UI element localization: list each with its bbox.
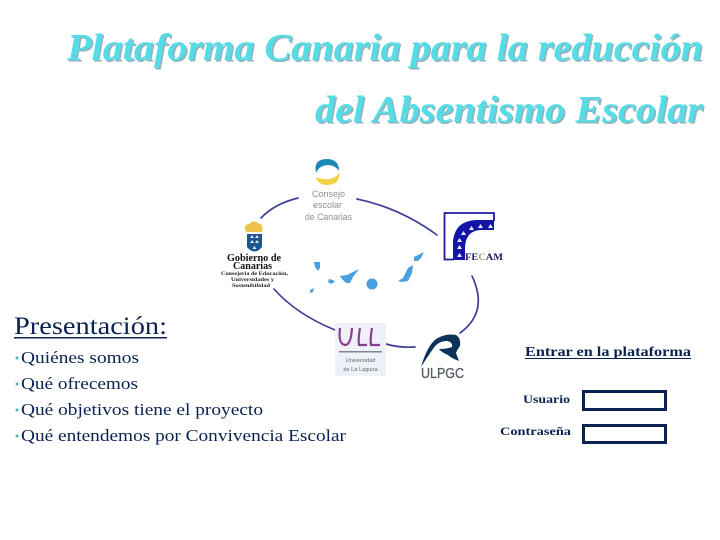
logo: Consejo escolar de Canarias: de Canarias xyxy=(305,212,352,222)
title: del Absentismo Escolar xyxy=(316,90,706,132)
logo: FECAM xyxy=(444,213,504,262)
logo: Gobierno de Canarias: Universidades y xyxy=(231,277,274,283)
login link: Entrar en la plataforma: Entrar en la plataforma xyxy=(525,344,691,359)
logo: Gobierno de Canarias xyxy=(221,222,289,289)
logo: FECAM: FECAM xyxy=(465,252,504,262)
bulleted list: Qué entendemos por Convivencia Escolar xyxy=(21,426,347,445)
login field: Contraseña: Contraseña xyxy=(500,424,571,438)
bulleted list: Qué objetivos tiene el proyecto xyxy=(21,400,263,419)
title: Plataforma Canaria para la reducción xyxy=(66,27,703,69)
logo: Universidad de La Laguna: de La Laguna xyxy=(343,367,378,373)
logo: Consejo escolar de Canarias: Consejo xyxy=(312,189,345,199)
login field: Usuario xyxy=(523,392,666,410)
logo: Consejo escolar de Canarias xyxy=(305,159,352,222)
login field: Usuario: Usuario xyxy=(523,392,570,406)
logo: Gobierno de Canarias: Gobierno de xyxy=(227,253,281,264)
title xyxy=(66,27,706,132)
logo: Universidad de La Laguna xyxy=(335,323,386,376)
bulleted list xyxy=(16,348,347,445)
logo: ULPGC: ULPGC xyxy=(421,366,464,382)
logo: Gobierno de Canarias: Consejería de Educación, xyxy=(221,271,289,277)
title: del Absentismo Escolar xyxy=(315,89,704,131)
logo: ULPGC xyxy=(421,334,464,382)
logo: Consejo escolar de Canarias: escolar xyxy=(313,200,342,210)
bulleted list: Quiénes somos xyxy=(21,348,139,367)
title: Plataforma Canaria para la reducción xyxy=(67,28,704,70)
bulleted list: Qué ofrecemos xyxy=(21,374,138,393)
logo: Gobierno de Canarias: Canarias xyxy=(233,261,272,272)
login field: Contraseña xyxy=(500,424,666,442)
icon: Canary Islands map xyxy=(310,252,424,293)
heading: Presentación: Presentación: xyxy=(14,313,167,340)
network connector arcs xyxy=(261,198,478,347)
logo: Universidad de La Laguna: Universidad xyxy=(346,358,375,364)
logo: Gobierno de Canarias: Sostenibilidad xyxy=(232,283,270,289)
